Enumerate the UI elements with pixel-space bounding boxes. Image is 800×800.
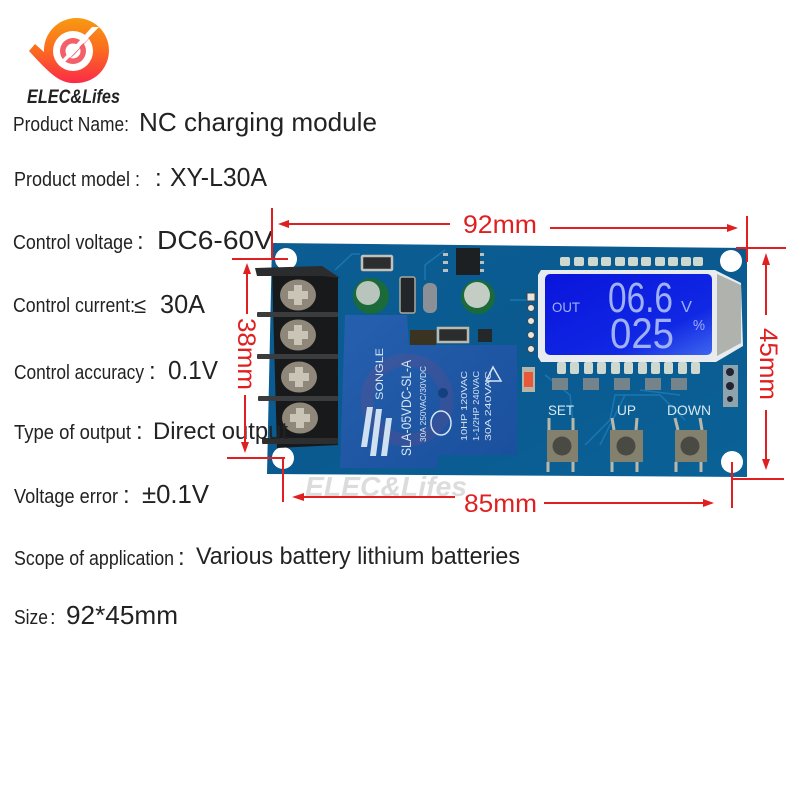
spec: control current: ≤ [134,293,146,318]
dimension: 92mm [232,208,786,262]
top components [353,248,495,345]
spec: size: 92*45mm [66,600,178,630]
spec: type of output: Type of output [14,422,131,444]
dimension: 92mm: 92mm [463,211,537,239]
lcd readout: % [693,317,705,334]
spec: control accuracy [14,355,219,385]
spec: scope of application: Various battery lithium batteries [196,543,520,570]
mounting holes [272,248,743,473]
spec value: direct output (over photo): Direct output [153,418,288,445]
dimension: 38mm [227,263,285,459]
pcb [267,243,747,477]
relay: SONGLE [340,315,517,468]
spec: product model: XY-L30A [170,162,268,192]
dimension: 38mm: 38mm [232,318,260,390]
spec: size [14,600,178,630]
spec: control voltage: DC6-60V [157,225,274,255]
button: up [610,418,643,472]
dimension lines [227,208,786,518]
spec: control voltage: : [137,228,144,255]
relay label text: SLA-05VDC-SL-A [398,359,414,456]
relay label text: 30A 250VAC/30VDC [419,366,428,442]
button labels [548,402,711,418]
dimension: 45mm: 45mm [754,328,782,400]
spec: product model [14,162,268,192]
spec: control current: Control current: [13,295,135,317]
spec: voltage error [14,479,210,509]
pin header [527,293,535,352]
icon: orange target swoosh [29,18,109,83]
button labels: UP [617,402,636,418]
watermark: ELEC&Lifes [305,471,467,502]
spec: size: Size [14,607,48,629]
module photo: charging board [255,243,747,477]
spec: control accuracy: Control accuracy [14,362,144,384]
spec: product model: : [155,165,162,192]
spec: control current: 30A [160,289,206,319]
spec: control voltage: Control voltage [13,232,133,254]
spec list [13,107,520,630]
relay label text: 30A 240VAC [484,371,493,441]
relay label text: SONGLE [374,348,386,400]
button: down [675,418,707,472]
lcd readout: V [681,299,692,316]
screw terminal block [255,266,340,448]
small smd parts [552,378,687,390]
spec: voltage error: ±0.1V [142,479,210,509]
button: set [547,418,578,472]
output header [723,365,738,407]
spec: voltage error: : [123,482,130,509]
spec: size: : [50,607,56,629]
spec: scope of application [14,543,520,571]
lcd pins [557,257,703,374]
logo: ELEC&Lifes [27,18,120,108]
power LED [522,367,535,392]
spec: voltage error: Voltage error [14,486,118,508]
relay brand logo [361,407,392,456]
spec: product name [13,107,377,137]
spec: control voltage [13,225,274,255]
relay label text: 1-1/2HP 240VAC [472,371,481,441]
tactile buttons [547,418,707,472]
button labels: SET [548,402,574,418]
button labels: DOWN [667,402,711,418]
spec: product name: Product Name: [13,114,129,136]
spec: control current [13,289,206,319]
spec: scope of application: : [178,544,185,571]
relay watermark ring [367,360,447,440]
spec: product name: NC charging module [139,107,377,137]
lcd readout [552,274,705,358]
spec: control accuracy: : [149,358,156,385]
lcd readout: OUT [552,299,580,315]
circuit traces [335,250,685,445]
screws [280,280,318,434]
logo wordmark: ELEC&Lifes [27,87,120,108]
lcd display [538,270,743,362]
spec: control accuracy: 0.1V [168,355,219,385]
spec: type of output: : [136,418,143,445]
spec: product model: Product model : [14,169,140,191]
spec: scope of application: Scope of application [14,548,174,570]
dimension: 45mm [732,253,784,480]
lcd readout: 06.6 [608,274,673,322]
lcd readout: 025 [610,310,674,358]
relay label text [374,348,493,456]
dimension: 85mm [282,458,733,518]
relay label text: 10HP 120VAC [460,371,469,441]
dimension: 85mm: 85mm [464,490,537,518]
